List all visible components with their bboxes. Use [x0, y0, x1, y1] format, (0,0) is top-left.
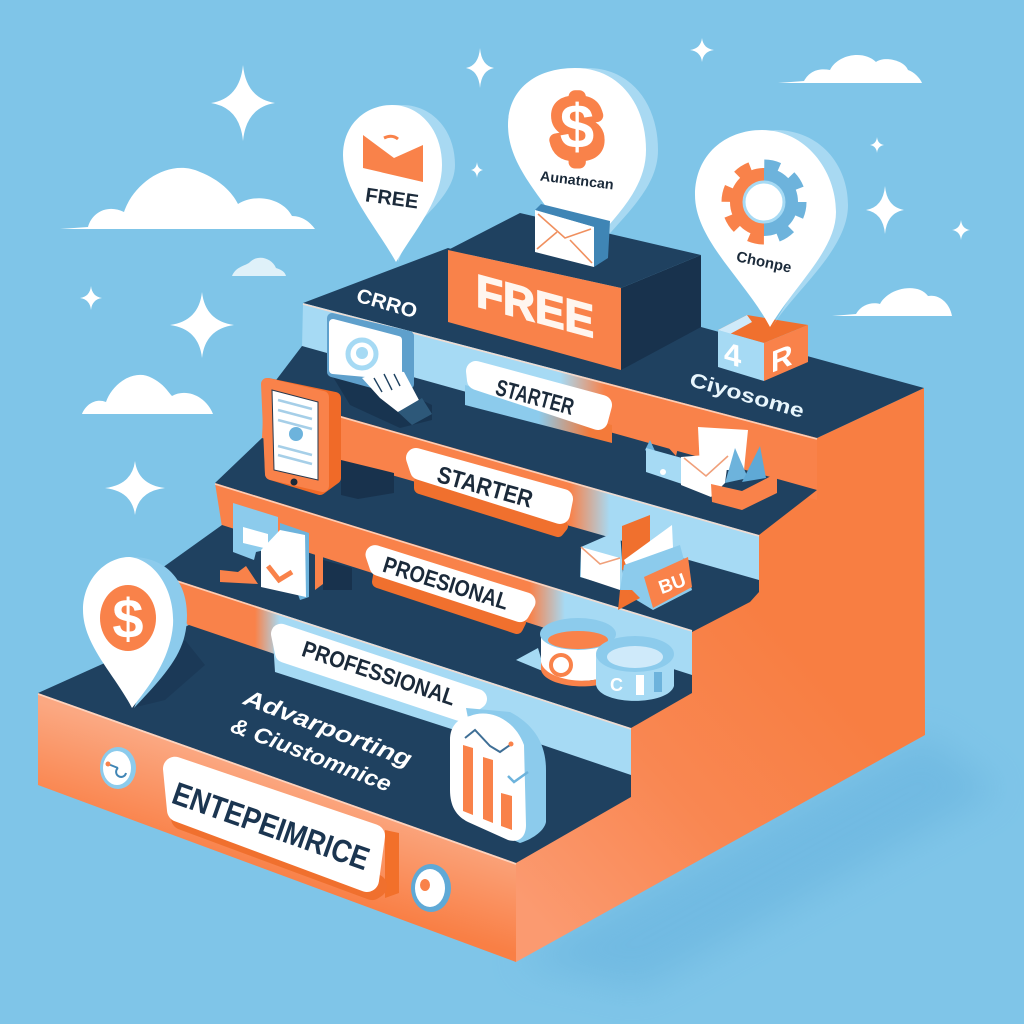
pin: FREE envelope — [343, 105, 455, 262]
FREE label: FREE — [476, 265, 594, 347]
step 2 top surface — [155, 525, 692, 728]
card with hand cursor — [330, 318, 432, 428]
step 3 top surface — [215, 438, 759, 632]
pin: gear — [695, 130, 848, 327]
pin: dollar bottom — [83, 557, 205, 708]
pin label: Aunatncan — [539, 168, 615, 192]
step 1 top surface — [38, 625, 631, 863]
gear icon — [727, 165, 801, 239]
office items on step 4 — [645, 412, 777, 510]
sign: PROFESSIONAL — [273, 634, 490, 735]
sign: ENTERPRISE: ENTEPEIMRICE — [168, 775, 374, 877]
orange side wall — [516, 388, 925, 962]
step 4 riser — [262, 394, 759, 582]
FREE box — [448, 213, 701, 370]
sign: PROFESSIONAL: PROFESSIONAL — [299, 636, 459, 710]
coin icon: $ — [112, 587, 144, 650]
sign: STARTER lower: STARTER — [434, 461, 536, 514]
pin: dollar top — [508, 68, 658, 240]
open box with glyphs: R — [771, 337, 793, 380]
step 5 top surface — [303, 248, 924, 438]
dollar icon: $ — [560, 93, 594, 162]
sign: PROESIONAL: PROESIONAL — [380, 551, 512, 615]
trend line — [465, 730, 510, 752]
envelope block — [535, 204, 610, 267]
text: Advanced reporting and customisation: Advarporting — [239, 684, 416, 772]
clouds — [60, 55, 952, 414]
mail and folder items on step 3 — [580, 515, 692, 610]
sign: STARTER upper — [465, 371, 612, 443]
coin icon — [100, 585, 156, 651]
envelope icon — [363, 135, 423, 182]
step 5 riser — [302, 303, 817, 500]
chart card — [450, 708, 546, 843]
sign: STARTER upper: STARTER — [493, 374, 577, 420]
chat and check cards — [220, 503, 352, 600]
sign: STARTER lower — [416, 458, 563, 531]
bowls on step 2: C — [610, 675, 623, 695]
text: Advanced reporting and customisation: & Ciustomnice — [227, 712, 395, 797]
round badge: right — [411, 864, 451, 912]
label: Cryosome: Ciyosome — [687, 369, 806, 423]
dollar icon: $ — [555, 84, 599, 173]
bars — [463, 745, 512, 830]
pin label: FREE — [364, 184, 420, 214]
round badge: left — [100, 747, 136, 789]
sparkles — [80, 38, 970, 515]
mail and folder items on step 3: BU — [656, 570, 689, 599]
bowls on step 2 — [516, 618, 674, 701]
open box with glyphs — [718, 315, 808, 381]
step 2 riser — [155, 573, 631, 777]
step 3 riser — [215, 483, 692, 677]
pin label: Chonpe — [735, 248, 793, 277]
open box with glyphs: 4 — [724, 335, 742, 375]
step 4 top surface — [264, 346, 817, 535]
ground shadow — [516, 735, 1000, 990]
step 1 front face — [38, 693, 516, 962]
label: CRRO: CRRO — [354, 285, 420, 323]
tablet — [267, 384, 394, 499]
text: Advanced reporting and customisation — [227, 684, 416, 797]
